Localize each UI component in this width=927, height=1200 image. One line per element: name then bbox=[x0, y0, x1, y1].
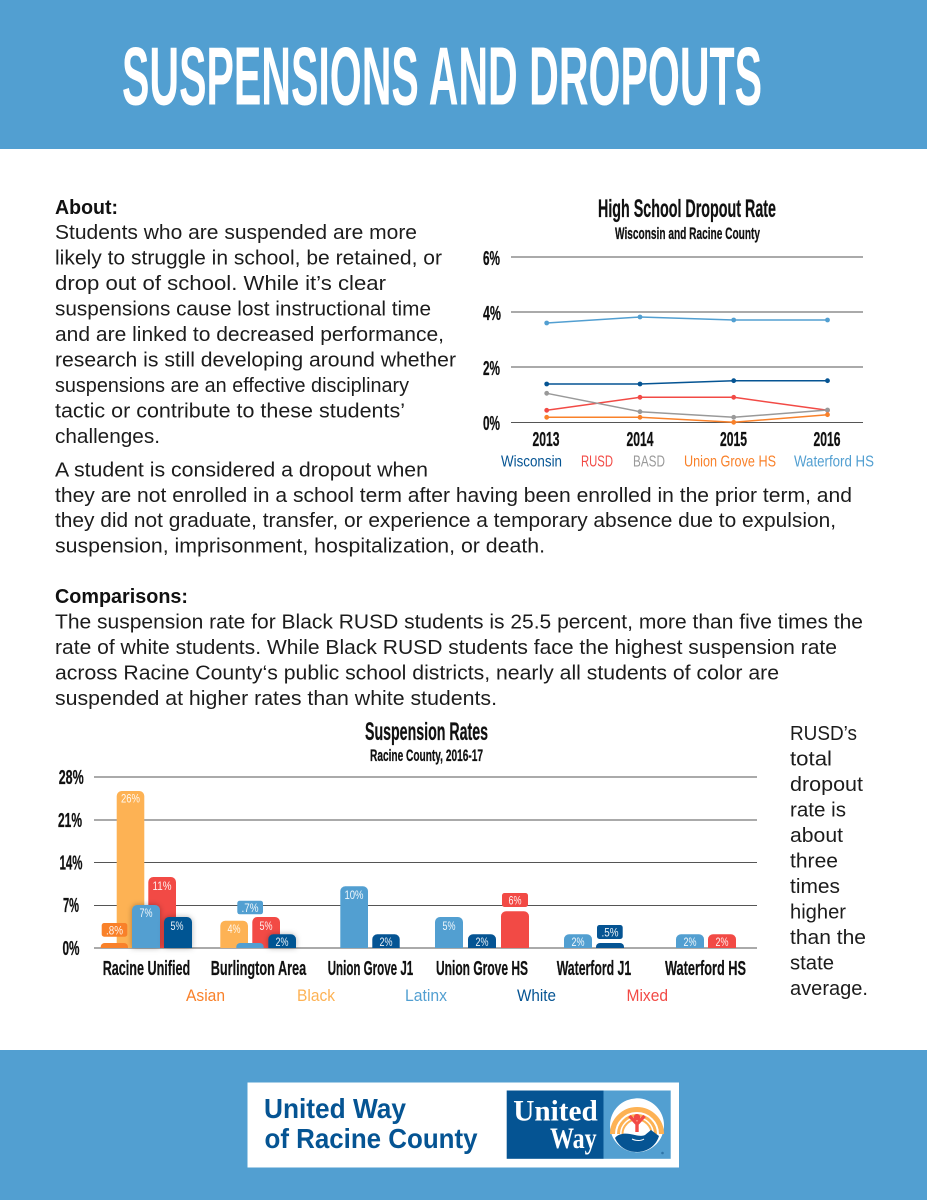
line: BASD bbox=[544, 391, 830, 420]
bars: Waterford J1: 2% bbox=[572, 935, 585, 949]
y axis labels: 28% bbox=[59, 767, 84, 789]
organisation name: United Way bbox=[264, 1093, 406, 1124]
y axis labels: 0% bbox=[62, 938, 80, 960]
line chart: high school dropout rate bbox=[483, 195, 874, 470]
y axis labels: 14% bbox=[60, 852, 83, 874]
callout: RUSD dropout rate: higher bbox=[790, 900, 846, 924]
bars: Racine Unified: 5% bbox=[170, 919, 184, 933]
bars: Burlington Area: 5% bbox=[260, 919, 273, 933]
bar chart legend: White bbox=[517, 986, 556, 1005]
text block: about: they are not enrolled in a school term after having been enrolled in the prior term, and bbox=[55, 484, 852, 507]
bars: Racine Unified: 26% bbox=[121, 792, 140, 806]
chart title: High School Dropout Rate bbox=[598, 195, 776, 223]
bars: Burlington Area: .7% bbox=[242, 901, 259, 915]
text block: about: tactic or contribute to these students’ bbox=[55, 400, 405, 422]
text block: about: Students who are suspended are more bbox=[55, 221, 417, 244]
callout: RUSD dropout rate: dropout bbox=[790, 773, 863, 796]
bars: Union Grove J1: 2% bbox=[380, 935, 393, 949]
line: Union Grove HS bbox=[544, 412, 830, 425]
text block: about: drop out of school. While it’s clear bbox=[55, 272, 386, 295]
text block: about: suspensions are an effective disciplinary bbox=[55, 374, 410, 397]
callout: RUSD dropout rate: rate is bbox=[790, 798, 846, 822]
bars: Racine Unified: 7% bbox=[140, 906, 153, 920]
text block: comparisons: across Racine County‘s public school districts, nearly all students of color are bbox=[55, 662, 779, 684]
callout: RUSD dropout rate: three bbox=[790, 850, 838, 872]
text block: comparisons: The suspension rate for Black RUSD students is 25.5 percent, more than five times the bbox=[55, 610, 863, 634]
y axis labels: 2% bbox=[483, 358, 500, 380]
text block: about: suspension, imprisonment, hospitalization, or death. bbox=[55, 534, 545, 558]
x axis labels: 2016 bbox=[814, 429, 840, 451]
callout: RUSD dropout rate bbox=[790, 722, 868, 1000]
line: Wisconsin bbox=[544, 378, 830, 386]
callout: RUSD dropout rate: about bbox=[790, 824, 843, 847]
district labels: Union Grove J1 bbox=[328, 957, 413, 980]
bar chart title: Suspension Rates bbox=[365, 718, 488, 746]
bar chart subtitle: Racine County, 2016-17 bbox=[370, 747, 483, 765]
chart legend: Wisconsin bbox=[501, 454, 562, 470]
line: Waterford HS bbox=[544, 315, 830, 325]
x axis labels: 2013 bbox=[532, 429, 560, 451]
text block: about: suspensions cause lost instructional time bbox=[55, 298, 431, 320]
bars: Union Grove HS: 5% bbox=[442, 919, 456, 933]
bar chart: suspension rates bbox=[58, 718, 757, 1005]
organisation name: of Racine County bbox=[264, 1123, 478, 1154]
district labels: Waterford HS bbox=[665, 957, 746, 980]
text block: about: challenges. bbox=[55, 425, 160, 448]
bars: Burlington Area: 4% bbox=[228, 922, 241, 936]
bars: Racine Unified: 11% bbox=[152, 879, 172, 893]
bars: Waterford J1 bbox=[564, 925, 624, 949]
y axis labels: 21% bbox=[58, 810, 82, 832]
district labels: Burlington Area bbox=[211, 957, 307, 980]
text block: about: research is still developing around whether bbox=[55, 348, 456, 372]
logo wordmark bbox=[507, 1090, 604, 1159]
chart legend bbox=[501, 454, 874, 470]
header banner bbox=[0, 0, 927, 149]
district labels bbox=[103, 957, 746, 980]
callout: RUSD dropout rate: state bbox=[790, 952, 834, 974]
callout: RUSD dropout rate: average. bbox=[790, 977, 868, 1000]
y axis labels: 0% bbox=[483, 413, 500, 435]
bars: Waterford HS: 2% bbox=[684, 935, 697, 949]
chart subtitle: Wisconsin and Racine County bbox=[615, 225, 760, 243]
bars: Union Grove J1: 10% bbox=[344, 888, 364, 902]
x axis labels bbox=[532, 429, 840, 451]
organisation name bbox=[264, 1093, 478, 1154]
text block: about: and are linked to decreased performance, bbox=[55, 323, 444, 346]
text block: comparisons bbox=[55, 585, 863, 710]
text block: comparisons: rate of white students. While Black RUSD students face the highest suspension rate bbox=[55, 636, 837, 659]
bar chart legend bbox=[186, 986, 668, 1005]
text block: about: likely to struggle in school, be retained, or bbox=[55, 246, 442, 270]
y axis labels bbox=[58, 767, 84, 960]
logo wordmark: United bbox=[513, 1094, 598, 1128]
x axis labels: 2014 bbox=[626, 429, 654, 451]
chart legend: Union Grove HS bbox=[684, 454, 776, 470]
chart legend: Waterford HS bbox=[794, 454, 874, 470]
bars: Union Grove HS: 6% bbox=[508, 894, 522, 908]
text block: about: A student is considered a dropout when bbox=[55, 458, 428, 482]
district labels: Union Grove HS bbox=[436, 957, 528, 980]
bars: Union Grove HS bbox=[435, 893, 529, 949]
logo panel bbox=[248, 1082, 679, 1168]
callout: RUSD dropout rate: RUSD’s bbox=[790, 722, 857, 745]
x axis labels: 2015 bbox=[720, 429, 747, 451]
callout: RUSD dropout rate: than the bbox=[790, 926, 866, 949]
text block: about bbox=[55, 196, 852, 558]
y axis labels: 7% bbox=[63, 895, 79, 917]
y axis labels: 4% bbox=[483, 303, 501, 325]
line: RUSD bbox=[544, 395, 830, 413]
y axis labels bbox=[483, 248, 501, 435]
bar chart legend: Mixed bbox=[626, 986, 668, 1005]
bars: Waterford J1: .5% bbox=[602, 926, 619, 940]
logo wordmark: Way bbox=[550, 1122, 597, 1155]
text block: about: About: bbox=[55, 196, 118, 219]
text block: comparisons: suspended at higher rates than white students. bbox=[55, 687, 497, 710]
footer band bbox=[0, 1050, 927, 1200]
bars: Union Grove HS: 2% bbox=[476, 935, 489, 949]
district labels: Waterford J1 bbox=[557, 957, 631, 980]
bar chart legend: Black bbox=[297, 986, 335, 1005]
y axis labels: 6% bbox=[483, 248, 500, 270]
bars: Burlington Area bbox=[220, 901, 296, 949]
text block: comparisons: Comparisons: bbox=[55, 585, 188, 608]
bars: Waterford HS bbox=[676, 934, 736, 949]
chart legend: RUSD bbox=[581, 454, 613, 470]
chart legend: BASD bbox=[633, 454, 665, 470]
bar chart legend: Latinx bbox=[405, 986, 447, 1005]
bar chart legend: Asian bbox=[186, 986, 225, 1005]
bars: Burlington Area: 2% bbox=[276, 935, 289, 949]
text block: about: they did not graduate, transfer, or experience a temporary absence due to expulsion, bbox=[55, 509, 836, 532]
bars: Racine Unified bbox=[101, 791, 192, 948]
bars: Waterford HS: 2% bbox=[716, 935, 729, 949]
callout: RUSD dropout rate: total bbox=[790, 748, 832, 770]
bars: Racine Unified: .8% bbox=[106, 923, 123, 937]
callout: RUSD dropout rate: times bbox=[790, 875, 840, 898]
logo icon: hand, person and rainbow bbox=[604, 1090, 671, 1159]
bars: Union Grove J1 bbox=[340, 886, 400, 949]
district labels: Racine Unified bbox=[103, 957, 190, 980]
